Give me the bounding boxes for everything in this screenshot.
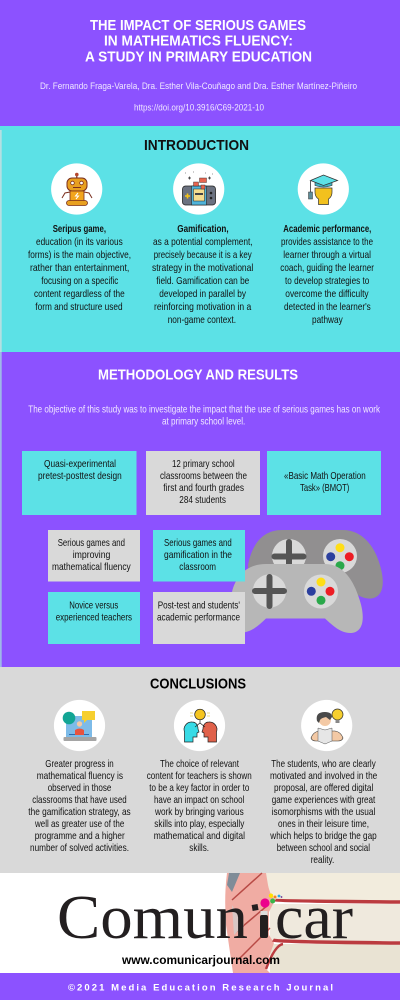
box: classroom: gamification in the: [164, 550, 232, 561]
icon: back game controller: [248, 530, 383, 599]
text: serious game: education (in its various: [36, 237, 123, 248]
text: students: motivated and involved in the: [270, 771, 378, 782]
text: academic performance: pathway: [312, 315, 343, 326]
objective text: [28, 405, 381, 428]
box: sample: classrooms between the: [160, 471, 247, 482]
text: relevant content: have an impact on school: [154, 795, 244, 806]
box: sample: 12 primary school: [172, 459, 235, 470]
logo: Comunicar: i: [258, 884, 269, 952]
box: instrument: Task» (BMOT): [300, 483, 349, 494]
text: academic performance: provides assistance to the: [281, 237, 373, 248]
text: relevant content: skills into play, especially: [154, 819, 245, 830]
box: sample: 284 students: [179, 495, 226, 506]
icon: student reading: [301, 700, 352, 751]
text: serious game: focusing on a specific: [41, 276, 118, 287]
heading: conclusions: CONCLUSIONS: [150, 676, 246, 692]
text: gamification: precisely because it is a key: [154, 250, 252, 261]
text: academic performance: detected in the learner's: [284, 302, 371, 313]
text: serious game: Seripus game,: [53, 224, 106, 235]
box: instrument: [267, 451, 381, 515]
text: progress: mathematical fluency is: [37, 771, 123, 782]
text: gamification: developed in parallel by: [159, 289, 247, 300]
text: students: ones in their leisure time,: [278, 819, 369, 830]
box: sample: [146, 451, 260, 515]
text: progress: number of solved activities.: [30, 843, 129, 854]
book photo: [225, 873, 400, 973]
box: post-test: academic performance: [157, 612, 240, 624]
box: fluency: Serious games and: [58, 538, 125, 549]
text: progress: [28, 759, 131, 854]
text: gamification: [152, 224, 253, 326]
box: design: pretest-posttest design: [38, 471, 122, 482]
title: A STUDY IN PRIMARY EDUCATION: [85, 48, 312, 66]
title: IN MATHEMATICS FLUENCY:: [104, 32, 293, 50]
text: progress: the gamification strategy, as: [28, 807, 131, 818]
logo: Comunicar: [57, 884, 353, 952]
doi link: https://doi.org/10.3916/C69-2021-10: [134, 102, 264, 114]
title: THE IMPACT OF SERIOUS GAMES: [90, 17, 306, 34]
text: progress: well as greater use of the: [34, 819, 125, 830]
text: gamification: field. Gamification can be: [156, 276, 250, 287]
text: students: which helps to bridge the gap: [269, 831, 377, 842]
text: academic performance: learner through a virtual: [283, 250, 371, 261]
website: www.comunicarjournal.com: [121, 953, 280, 967]
text: gamification: strategy in the motivational: [152, 263, 253, 274]
text: gamification: reinforcing motivation in a: [154, 302, 252, 313]
header panel: [0, 0, 400, 126]
text: progress: programme and a higher: [35, 831, 125, 842]
text: relevant content: work by bringing various: [154, 807, 244, 818]
text: serious game: [28, 224, 131, 313]
heading: methodology and results: METHODOLOGY AND RESULTS: [98, 366, 298, 384]
text: progress: classrooms that have used: [32, 795, 127, 806]
box: classroom: [153, 530, 245, 582]
icon: front game controller: [230, 564, 363, 633]
icon: robot: [51, 163, 102, 215]
text: serious game: forms) is the main objective,: [28, 250, 131, 261]
footer: ©2021 Media Education Research Journal: [68, 983, 333, 994]
text: gamification: non-game context.: [168, 315, 236, 326]
icon: game console: [173, 163, 224, 215]
text: progress: Greater progress in: [45, 759, 114, 770]
text: students: game experiences with great: [272, 795, 375, 806]
text: progress: observed in those: [48, 783, 112, 794]
text: academic performance: to develop strategies to: [285, 276, 370, 287]
icon: two heads and bulb: [174, 700, 225, 751]
logo: Comunicar: car: [275, 884, 353, 952]
text: academic performance: overcome the difficulty: [285, 289, 369, 300]
text: students: [269, 759, 378, 866]
text: relevant content: skills.: [189, 843, 209, 854]
panel: introduction: [0, 126, 400, 352]
box: teachers: [48, 592, 140, 644]
footer: [0, 973, 400, 1000]
text: relevant content: to be a key factor in order to: [149, 783, 250, 794]
text: relevant content: mathematical and digital: [154, 831, 245, 842]
text: students: reality.: [311, 855, 334, 866]
box: sample: first and fourth grades: [163, 483, 244, 494]
text: students: proposal, are offered digital: [274, 783, 373, 794]
text: serious game: rather than entertainment,: [30, 263, 129, 274]
text: academic performance: Academic performance,: [283, 224, 371, 235]
box: classroom: classroom: [179, 562, 216, 573]
authors: Dr. Fernando Fraga-Varela, Dra. Esther Vila-Couñago and Dra. Esther Martínez-Piñeiro: [40, 81, 357, 92]
box: design: [22, 451, 136, 515]
box: fluency: improving: [73, 550, 111, 561]
text: students: isomorphisms with the usual: [272, 807, 375, 818]
box: classroom: Serious games and: [164, 538, 232, 549]
text: relevant content: content for teachers is shown: [147, 771, 252, 782]
panel: methodology and results: [0, 352, 400, 667]
heading: introduction: INTRODUCTION: [144, 137, 249, 154]
box: post-test: Post-test and students': [158, 600, 240, 612]
text: academic performance: [280, 224, 374, 326]
text: serious game: content regardless of the: [34, 289, 125, 300]
text: gamification: as a potential complement,: [153, 237, 253, 248]
text: academic performance: coach, guiding the learner: [280, 263, 374, 274]
box: teachers: experienced teachers: [56, 612, 132, 624]
box: post-test: [153, 592, 245, 644]
title: [85, 17, 312, 66]
text: relevant content: [147, 759, 252, 854]
box: design: Quasi-experimental: [44, 459, 116, 470]
icon: graduation cap and bulb: [298, 163, 349, 215]
box: instrument: «Basic Math Operation: [284, 471, 366, 482]
objective text: at primary school level.: [162, 417, 245, 428]
icon: online teaching: [54, 700, 105, 751]
box: fluency: [48, 530, 140, 582]
panel: journal logo banner: [0, 873, 400, 973]
logo: Comunicar: Comun: [57, 884, 248, 952]
text: relevant content: The choice of relevant: [160, 759, 239, 770]
text: students: between school and social: [277, 843, 370, 854]
text: gamification: Gamification,: [177, 224, 229, 235]
box: teachers: Novice versus: [69, 600, 118, 612]
box: fluency: mathematical fluency: [52, 562, 131, 573]
panel: conclusions: [0, 667, 400, 873]
text: serious game: form and structure used: [35, 302, 123, 313]
